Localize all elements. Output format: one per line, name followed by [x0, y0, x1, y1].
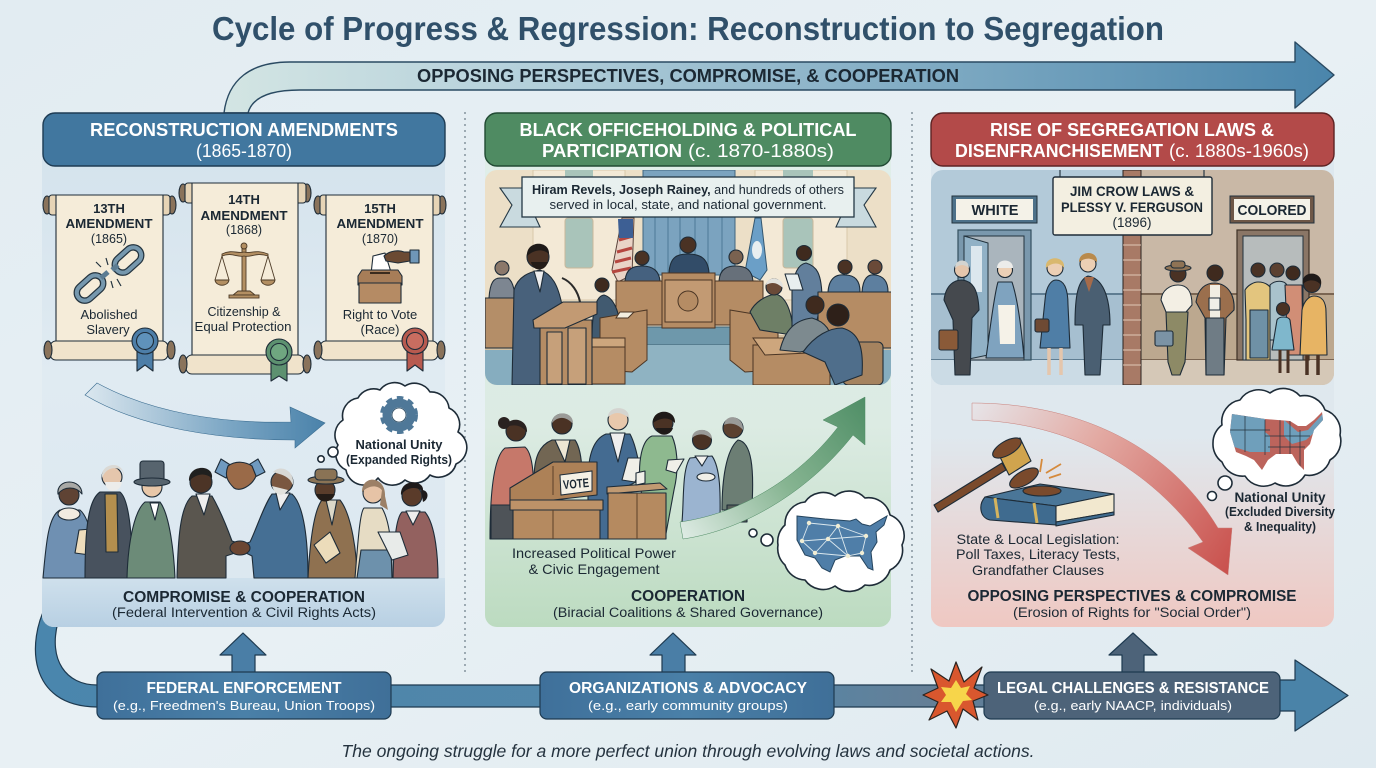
sign: colored: COLORED — [1238, 202, 1307, 219]
caption: opposing perspectives and compromise — [968, 588, 1297, 620]
caption: opposing perspectives and compromise: OPPOSING PERSPECTIVES & COMPROMISE — [968, 588, 1297, 605]
box: federal enforcement — [97, 672, 391, 719]
figure: woman in coral shirt — [490, 417, 534, 539]
panel: rise of segregation — [931, 113, 1341, 627]
figure: man in brown hat and jacket — [308, 469, 357, 578]
scroll: 14th amendment — [179, 183, 311, 381]
thought cloud: national unity expanded rights — [318, 383, 467, 485]
caption: cooperation: COOPERATION — [631, 588, 745, 605]
heading: reconstruction amendments: (1865-1870) — [196, 141, 292, 161]
door: colored entrance — [1237, 230, 1309, 360]
desks right — [730, 310, 830, 385]
heading: rise of segregation — [931, 113, 1334, 166]
illustration: legislature chamber — [485, 170, 893, 385]
figure: elder seated right — [750, 279, 792, 335]
icon: clasped hands — [230, 541, 250, 555]
scroll: 14th amendment: AMENDMENT — [200, 208, 288, 223]
arrow: bottom band and curved return — [35, 606, 1285, 707]
sign: jim crow laws: (1896) — [1112, 215, 1152, 230]
caption: compromise and cooperation — [112, 589, 376, 620]
scroll: 14th amendment: (1868) — [226, 223, 262, 237]
heading: black officeholding — [485, 113, 891, 166]
icon: explosion — [923, 662, 988, 728]
title: Cycle of Progress & Regression: Reconstruction to Segregation — [212, 10, 1164, 47]
icon: scales of justice — [215, 243, 275, 298]
figure: black man in grey suit — [177, 468, 238, 578]
podium: vote — [510, 462, 603, 539]
desks left — [592, 310, 647, 384]
panel: black officeholding — [485, 113, 904, 627]
arrow: red decline arrow — [972, 403, 1232, 575]
brick column — [1123, 170, 1141, 385]
figure: white man in blue suit — [588, 408, 645, 539]
sign: jim crow laws — [1053, 170, 1212, 235]
caption: opposing perspectives and compromise: (Erosion of Rights for "Social Order") — [1013, 605, 1251, 620]
box: federal enforcement: FEDERAL ENFORCEMENT — [146, 680, 342, 697]
caption: state and local legislation — [956, 531, 1120, 578]
arrow: up to panel three — [1109, 633, 1157, 673]
caption: political power — [512, 545, 676, 577]
heading: reconstruction amendments — [43, 113, 445, 166]
flag: blue — [745, 218, 767, 280]
heading: black officeholding: PARTICIPATION — [542, 141, 682, 161]
figure: man in brown jacket — [1196, 265, 1234, 375]
figure: man with briefcase — [939, 260, 979, 375]
arrow: up to panel one — [220, 633, 266, 673]
icon: gear — [383, 399, 415, 431]
scroll: 15th amendment: AMENDMENT — [336, 216, 424, 231]
icon: ballot box — [358, 250, 419, 303]
figure: man in top hat and green coat — [127, 461, 175, 578]
figure: foreground seated member — [803, 304, 883, 385]
figure: man in grey suit — [1075, 253, 1110, 375]
figure: right officer — [719, 250, 753, 281]
caption: national unity excluded diversity: & Inequality) — [1244, 519, 1316, 534]
podium: vote: VOTE — [562, 476, 590, 492]
arrow: blue progress arrow — [85, 383, 325, 448]
sign: jim crow laws: JIM CROW LAWS & — [1070, 183, 1194, 199]
box: legal challenges and resistance: LEGAL CHALLENGES & RESISTANCE — [997, 680, 1269, 697]
scroll: 14th amendment: Equal Protection — [194, 320, 292, 334]
tagline: The ongoing struggle for a more perfect union through evolving laws and societal actions. — [342, 741, 1034, 761]
scroll: 13th amendment: Abolished — [80, 307, 138, 322]
scroll: 15th amendment: (1870) — [362, 232, 398, 246]
arrow: opposing perspectives top band: OPPOSING PERSPECTIVES, COMPROMISE, & COOPERATION — [417, 66, 959, 86]
scroll: 13th amendment — [43, 195, 176, 371]
figure: elder man in grey-green suit — [722, 417, 753, 522]
heading: rise of segregation: RISE OF SEGREGATION LAWS & — [990, 120, 1274, 140]
people: diverse group shaking hands — [43, 461, 438, 578]
figure: girl in blue dress — [1272, 302, 1294, 373]
flag: american — [612, 218, 634, 282]
figure: left back bench member — [485, 260, 514, 348]
thought cloud: divided map — [1208, 388, 1341, 500]
heading: black officeholding: (c. 1870-1880s) — [688, 141, 834, 161]
figure: left officer — [625, 251, 660, 281]
figure: elder in blue coat — [244, 468, 308, 578]
thought cloud: connected map — [749, 491, 904, 591]
right back bench — [818, 260, 893, 348]
figure: woman in maroon dress — [378, 482, 438, 578]
figure: woman in apron — [986, 260, 1024, 358]
sign: colored — [1230, 196, 1314, 223]
figure: woman in blue dress — [43, 482, 104, 578]
banner: officeholders: Hiram Revels, Joseph Rainey, and hundreds of others — [532, 182, 844, 197]
figure: standing man with paper — [784, 245, 822, 326]
scroll: 13th amendment: (1865) — [91, 232, 127, 246]
icon: handshake — [215, 459, 265, 489]
arrow: green rising arrow — [680, 397, 865, 539]
banner: officeholders: served in local, state, and national government. — [550, 197, 826, 212]
scroll: 14th amendment: 14TH — [228, 192, 260, 207]
lectern and microphone — [533, 278, 597, 385]
box: legal challenges and resistance: (e.g., early NAACP, individuals) — [1034, 698, 1232, 713]
box: organizations and advocacy: (e.g., early community groups) — [588, 698, 788, 713]
caption: political power: & Civic Engagement — [528, 561, 660, 577]
heading: black officeholding: BLACK OFFICEHOLDING & POLITICAL — [520, 120, 856, 140]
scroll: 14th amendment: Citizenship & — [208, 305, 281, 319]
icon: blue ribbon seal — [132, 328, 158, 371]
dais — [616, 273, 763, 328]
arrow: up to panel two — [650, 633, 696, 673]
thought cloud: national unity expanded rights: (Expanded Rights) — [346, 452, 452, 467]
caption: national unity excluded diversity: National Unity — [1234, 490, 1326, 505]
sign: white: WHITE — [972, 202, 1018, 219]
scroll: 13th amendment: AMENDMENT — [66, 216, 153, 231]
figure: clerk seated left — [592, 278, 618, 338]
caption: national unity excluded diversity — [1225, 490, 1336, 534]
box: federal enforcement: (e.g., Freedmen's Bureau, Union Troops) — [113, 698, 375, 713]
icon: green ribbon seal — [266, 339, 292, 381]
figure: elder woman in blue dress — [682, 430, 720, 522]
caption: state and local legislation: Poll Taxes, Literacy Tests, — [956, 546, 1120, 562]
banner: officeholders — [500, 177, 876, 227]
caption: state and local legislation: Grandfather Clauses — [972, 562, 1104, 578]
heading: rise of segregation: DISENFRANCHISEMENT — [955, 141, 1163, 161]
sign: jim crow laws: PLESSY V. FERGUSON — [1061, 199, 1203, 215]
icon: network map — [797, 516, 887, 572]
box: organizations and advocacy: ORGANIZATIONS & ADVOCACY — [569, 680, 808, 697]
figure: group in doorway — [1245, 263, 1303, 360]
figure: speaker at lectern — [512, 244, 562, 385]
people: voters at ballot — [490, 408, 753, 539]
arrow: bottom band head — [1278, 660, 1348, 731]
scroll: 15th amendment: Right to Vote — [343, 307, 417, 322]
figure: woman in cream blouse — [355, 480, 392, 578]
figure: seated member right — [780, 296, 832, 352]
caption: cooperation: (Biracial Coalitions & Shared Governance) — [553, 605, 823, 620]
dotted divider right — [911, 112, 913, 672]
caption: compromise and cooperation: COMPROMISE & COOPERATION — [123, 589, 365, 606]
figure: man in green sweater — [640, 412, 684, 539]
sign: white — [952, 196, 1037, 223]
scroll: 15th amendment: 15TH — [364, 201, 396, 216]
figure: woman in yellow dress — [1300, 274, 1327, 375]
scroll: 13th amendment: 13TH — [93, 201, 125, 216]
thought cloud: national unity expanded rights: National Unity — [356, 437, 443, 452]
caption: cooperation — [553, 588, 823, 620]
podium: ballot box — [607, 471, 667, 539]
icon: gavel on law book — [934, 434, 1114, 526]
scroll: 15th amendment — [314, 195, 446, 371]
panel: reconstruction amendments — [42, 113, 467, 627]
caption: national unity excluded diversity: (Excluded Diversity — [1225, 504, 1336, 519]
figure: presiding officer — [669, 237, 709, 273]
scroll: 15th amendment: (Race) — [360, 322, 400, 337]
figure: old man in brown jacket — [534, 413, 582, 480]
caption: political power: Increased Political Power — [512, 545, 676, 561]
arrow: opposing perspectives top band — [224, 42, 1334, 113]
icon: divided map — [1230, 412, 1323, 470]
caption: state and local legislation: State & Local Legislation: — [956, 531, 1120, 547]
caption: compromise and cooperation: (Federal Intervention & Civil Rights Acts) — [112, 605, 376, 620]
figure: woman in blue dress — [1035, 258, 1070, 375]
figure: man in hat with suitcase — [1155, 261, 1192, 375]
illustration: segregated entrances — [931, 170, 1334, 385]
heading: reconstruction amendments: RECONSTRUCTION AMENDMENTS — [90, 120, 398, 140]
box: organizations and advocacy — [540, 672, 834, 719]
door: white entrance — [958, 230, 1031, 360]
figure: bearded man in waistcoat — [85, 465, 133, 578]
icon: broken chain — [73, 244, 145, 304]
dotted divider left — [464, 112, 466, 672]
heading: rise of segregation: (c. 1880s-1960s) — [1169, 141, 1309, 161]
box: legal challenges and resistance — [984, 672, 1280, 719]
scroll: 13th amendment: Slavery — [86, 322, 130, 337]
icon: red ribbon seal — [402, 328, 428, 371]
